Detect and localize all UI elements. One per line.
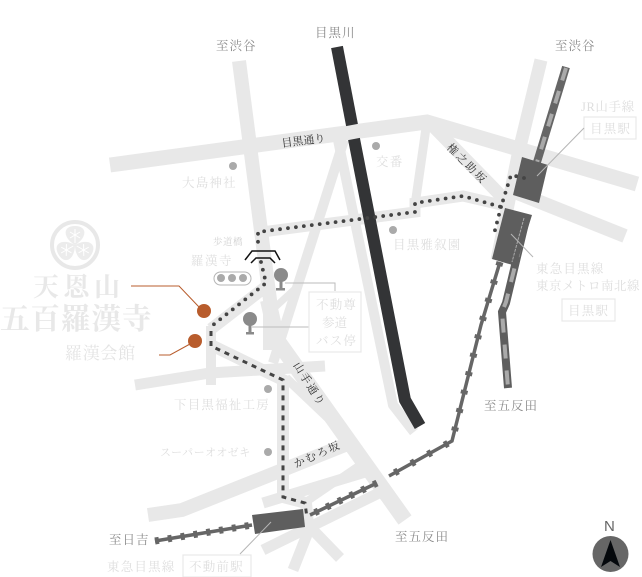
signal icon bbox=[214, 272, 251, 285]
label: Meguro-dori: 目黒通り bbox=[281, 132, 326, 150]
label: Gotanda right: 至五反田 bbox=[484, 399, 538, 413]
marker: Gohyaku Rakanji bbox=[131, 286, 211, 318]
railway: Tokyu Meguro / Namboku line bbox=[502, 215, 527, 388]
title: Gohyaku Rakanji: 五百羅漢寺 bbox=[0, 303, 153, 336]
marker: Super Ozeki bbox=[264, 448, 272, 456]
label: police box: 交番 bbox=[376, 154, 403, 169]
title: Tenonzan: 天恩山 bbox=[33, 273, 125, 302]
label: Yamate-dori: 山手通り bbox=[290, 360, 328, 409]
north compass: N bbox=[604, 518, 615, 535]
label: Kamuro-zaka: かむろ坂 bbox=[292, 438, 343, 471]
bus stop leader lines bbox=[252, 283, 335, 327]
marker: Meguro Gajoen bbox=[389, 226, 397, 234]
pedestrian bridge icon bbox=[245, 251, 280, 263]
label: Meguro River: 目黒川 bbox=[315, 26, 356, 40]
marker: welfare center bbox=[264, 385, 272, 393]
label: Rakan Kaikan: 羅漢会館 bbox=[65, 344, 136, 363]
marker: Rakan Kaikan bbox=[159, 334, 202, 355]
north compass bbox=[592, 518, 628, 572]
label: Meguro Gajoen: 目黒雅叙園 bbox=[393, 237, 462, 252]
callout: Fudo-son bus stop: 参道 bbox=[322, 315, 348, 330]
label: JR Yamanote line: JR山手線 bbox=[581, 100, 635, 114]
station: JR Meguro bbox=[513, 157, 548, 203]
leader line: JR Meguro bbox=[537, 128, 584, 176]
callout: JR Meguro station bbox=[584, 117, 636, 139]
label: Super Ozeki: スーパーオオゼキ bbox=[160, 446, 251, 459]
logo: Rakanji crest bbox=[52, 222, 98, 268]
callout: Fudomae station: 不動前駅 bbox=[189, 559, 244, 574]
railway: Tokyu line with ties bbox=[155, 262, 500, 541]
river: Meguro River bbox=[337, 47, 420, 426]
railway: JR Yamanote line bbox=[527, 67, 566, 195]
label: Shibuya left: 至渋谷 bbox=[216, 38, 257, 53]
label: Gotanda bottom: 至五反田 bbox=[395, 530, 449, 544]
station: Fudomae bbox=[252, 509, 305, 534]
callout: Meguro station bbox=[562, 299, 615, 321]
label: Tokyu Meguro line bottom: 東急目黒線 bbox=[107, 559, 176, 574]
callout: JR Meguro station: 目黒駅 bbox=[590, 122, 631, 136]
bus stop pin upper bbox=[274, 268, 288, 290]
label: Tokyu Meguro / Tokyo Metro Namboku: 東京メトロ南北線 bbox=[536, 278, 640, 293]
callout: Meguro station: 目黒駅 bbox=[568, 304, 609, 318]
walking route dots bbox=[213, 175, 524, 325]
callout: Fudo-son bus stop: バス停 bbox=[316, 334, 357, 348]
callout: Fudomae station bbox=[183, 555, 251, 577]
marker: Oshima shrine bbox=[229, 162, 237, 170]
leader line: Fudomae bbox=[240, 522, 271, 554]
label: Tokyu Meguro / Tokyo Metro Namboku: 東急目黒線 bbox=[536, 261, 605, 276]
marker: police box bbox=[372, 142, 380, 150]
label: pedestrian bridge: 歩道橋 bbox=[213, 236, 243, 248]
label: Rakanji: 羅漢寺 bbox=[191, 253, 233, 268]
bus stop pin lower bbox=[243, 312, 257, 334]
label: Shibuya right: 至渋谷 bbox=[555, 38, 596, 53]
station: Tokyu Meguro bbox=[492, 208, 532, 266]
label: Hiyoshi: 至日吉 bbox=[109, 532, 150, 547]
label: welfare center: 下目黒福祉工房 bbox=[174, 397, 270, 412]
label: Oshima shrine: 大島神社 bbox=[182, 175, 237, 190]
label: Tokyu Meguro / Tokyo Metro Namboku bbox=[536, 261, 640, 293]
callout: Fudo-son bus stop bbox=[309, 292, 361, 352]
road network bbox=[110, 60, 637, 570]
walking route dashes bbox=[211, 331, 307, 518]
label: Gonnosuke-zaka: 権之助坂 bbox=[444, 140, 491, 187]
leader line: Tokyu Meguro bbox=[511, 234, 533, 257]
callout: Fudo-son bus stop: 不動尊 bbox=[316, 297, 357, 312]
